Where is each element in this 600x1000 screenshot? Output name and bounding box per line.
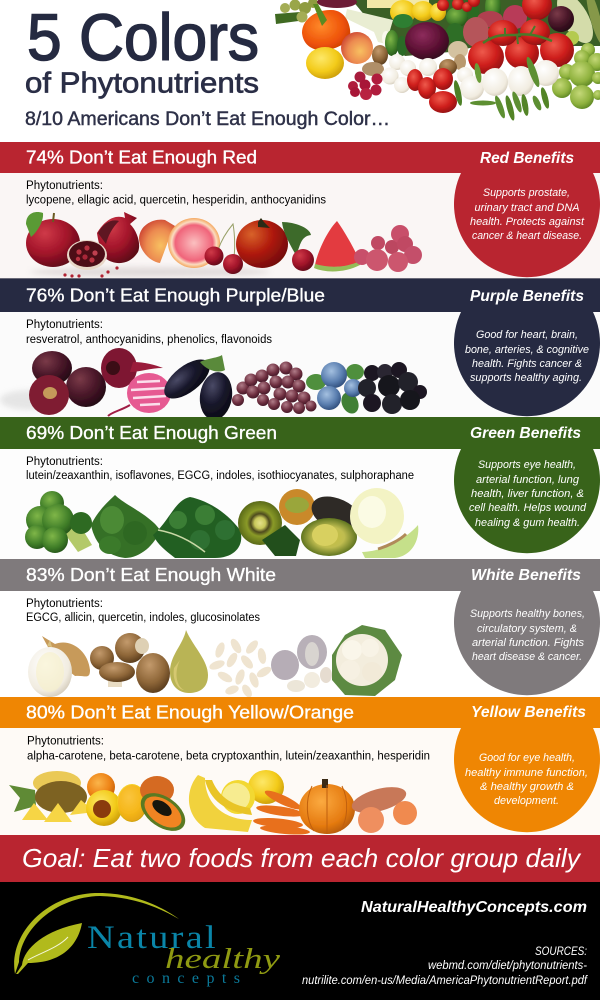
purple band <box>0 279 600 312</box>
orange content background <box>0 728 600 835</box>
red band heading: 74% Don’t Eat Enough Red <box>26 146 257 168</box>
yellow benefits text: & healthy growth & <box>480 781 574 793</box>
purple benefits text: supports healthy aging. <box>470 372 582 384</box>
red phytonutrients list: lycopene, ellagic acid, quercetin, hesperidin, anthocyanidins <box>26 194 326 206</box>
green band heading: 69% Don’t Eat Enough Green <box>26 422 277 443</box>
red benefits text: health. Protects against <box>470 216 585 228</box>
logo: Natural Healthy Concepts <box>14 893 281 987</box>
green phytonutrients list: Phytonutrients: <box>26 456 103 468</box>
green benefits text: arterial function, lung <box>476 474 580 486</box>
green content background <box>0 449 600 559</box>
orange phytonutrients list: Phytonutrients: <box>27 736 104 748</box>
green benefits text: cell health. Helps wound <box>469 502 587 514</box>
footer <box>0 882 600 1000</box>
red section bottom line <box>0 278 600 279</box>
white benefits text: Supports healthy bones, <box>470 608 585 620</box>
red foods photo strip <box>26 212 422 278</box>
yellow benefits text: development. <box>494 795 559 807</box>
white phytonutrients list: EGCG, allicin, quercetin, indoles, glucosinolates <box>26 612 260 624</box>
tagline: 8/10 Americans Don’t Eat Enough Color… <box>25 109 390 130</box>
green foods photo strip <box>25 488 418 558</box>
logo arc <box>14 893 179 974</box>
yellow benefits text: healthy immune function, <box>465 767 588 779</box>
panel: purple/blue <box>0 279 600 422</box>
sources: SOURCES: <box>535 946 587 958</box>
white benefits text: heart disease & cancer. <box>472 651 582 663</box>
purple content background <box>0 312 600 417</box>
red circle <box>454 173 600 277</box>
title block <box>25 0 390 130</box>
icon: leaf <box>16 923 82 974</box>
red band <box>0 142 600 173</box>
red benefits text: cancer & heart disease. <box>472 230 582 242</box>
orange band heading: 80% Don’t Eat Enough Yellow/Orange <box>26 702 354 722</box>
green benefits text: health, liver function, & <box>471 488 584 500</box>
subtitle: of Phytonutrients: of Phytonutrients <box>25 68 259 100</box>
panel: yellow/orange <box>0 697 600 839</box>
white phytonutrients list: Phytonutrients: <box>26 598 103 610</box>
yellow benefits heading: Yellow Benefits <box>471 704 586 721</box>
goal banner <box>0 835 600 882</box>
purple circle <box>454 312 600 416</box>
white benefits text: circulatory system, & <box>477 623 577 635</box>
white content background <box>0 591 600 697</box>
green phytonutrients list: lutein/zeaxanthin, isoflavones, EGCG, indoles, isothiocyanates, sulphoraphane <box>26 470 414 482</box>
purple benefits text: health. Fights cancer & <box>472 358 582 370</box>
red content background <box>0 173 600 279</box>
logo word: healthy: healthy <box>165 944 281 975</box>
sources: nutrilite.com/en-us/Media/AmericaPhytonutrientReport.pdf <box>302 975 589 987</box>
sources: webmd.com/diet/phytonutrients- <box>428 960 587 972</box>
white band <box>0 559 600 591</box>
purple band heading: 76% Don’t Eat Enough Purple/Blue <box>26 284 325 306</box>
goal text: Goal: Eat two foods from each color group daily <box>22 843 582 873</box>
purple benefits heading: Purple Benefits <box>470 288 584 305</box>
yellow benefits text: Good for eye health, <box>479 752 575 764</box>
leaf vein <box>28 937 68 960</box>
red benefits heading: Red Benefits <box>480 150 574 167</box>
orange phytonutrients list: alpha-carotene, beta-carotene, beta cryptoxanthin, lutein/zeaxanthin, hesperidin <box>27 750 430 762</box>
white benefits text: arterial function. Fights <box>472 637 584 649</box>
white circle <box>454 591 600 695</box>
panel: green <box>0 417 600 559</box>
white benefits heading: White Benefits <box>471 567 581 584</box>
panel: white <box>0 559 600 699</box>
orange foods photo strip <box>9 770 417 839</box>
purple foods photo strip <box>0 348 427 422</box>
website url: NaturalHealthyConcepts.com <box>361 899 587 916</box>
footer background <box>0 882 600 1000</box>
purple benefits text: Good for heart, brain, <box>476 329 578 341</box>
red benefits text: Supports prostate, <box>483 187 570 199</box>
panel: red <box>0 142 600 279</box>
orange circle <box>454 728 600 832</box>
green benefits heading: Green Benefits <box>470 425 581 442</box>
title: 5 Colors: 5 Colors <box>27 0 259 74</box>
purple phytonutrients list: resveratrol, anthocyanidins, phenolics, flavonoids <box>26 334 272 346</box>
green band <box>0 417 600 449</box>
white foods photo strip <box>28 625 402 699</box>
red benefits text: urinary tract and DNA <box>474 202 580 214</box>
white band heading: 83% Don’t Eat Enough White <box>26 564 276 585</box>
green benefits text: Supports eye health, <box>478 459 576 471</box>
purple phytonutrients list: Phytonutrients: <box>26 319 103 331</box>
red phytonutrients list: Phytonutrients: <box>26 180 103 192</box>
goal background <box>0 835 600 882</box>
logo word: concepts: concepts <box>132 970 240 987</box>
hero image: pile of colorful vegetables <box>275 0 600 121</box>
green benefits text: healing & gum health. <box>475 517 580 529</box>
purple benefits text: bone, arteries, & cognitive <box>465 344 589 356</box>
orange band <box>0 697 600 728</box>
logo word: Natural: Natural <box>87 920 218 956</box>
green circle <box>454 449 600 553</box>
